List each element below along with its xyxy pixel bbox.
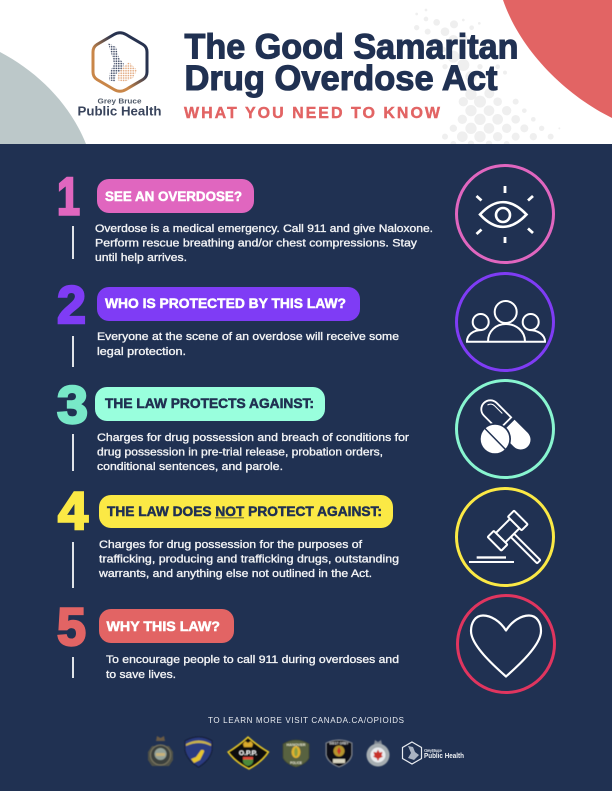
step 4: THE LAW DOES NOT PROTECT AGAINST:	[107, 504, 382, 519]
crest: OPP	[228, 737, 268, 769]
step 1: 1	[57, 168, 80, 226]
step 3: Charges for drug possession and breach of conditions for	[97, 432, 409, 444]
step 2	[57, 276, 399, 367]
step 5: 5	[57, 598, 86, 657]
logo: Grey Bruce Public Health	[78, 33, 162, 118]
crest: West Grey police	[326, 740, 352, 767]
title: Drug Overdose Act	[184, 59, 498, 98]
step 1: Overdose is a medical emergency. Call 911 and give Naloxone.	[95, 223, 433, 235]
crest: Saugeen First Nation police	[185, 737, 212, 767]
step 4: warrants, and anything else not outlined in the Act.	[98, 568, 372, 580]
title: The Good Samaritan	[184, 28, 518, 66]
step 2: WHO IS PROTECTED BY THIS LAW?	[105, 296, 346, 311]
step 1: Perform rescue breathing and/or chest compressions. Stay	[95, 238, 417, 250]
crest: Hanover police	[283, 740, 309, 767]
icon: gavel	[456, 488, 554, 586]
step 3	[57, 376, 409, 473]
step 1	[57, 168, 433, 264]
step 4	[58, 482, 399, 588]
step 5	[57, 598, 399, 681]
step 3: 3	[57, 376, 88, 435]
crest: OPP: O.P.P.	[239, 750, 257, 757]
logo: Grey Bruce Public Health: Grey Bruce	[98, 96, 142, 106]
logo: Grey Bruce Public Health white	[402, 742, 464, 764]
step 4: 4	[58, 482, 89, 541]
icon: heart	[458, 596, 554, 692]
step 3: THE LAW PROTECTS AGAINST:	[105, 396, 314, 411]
step 1: until help arrives.	[95, 252, 187, 264]
step 5: WHY THIS LAW?	[106, 619, 220, 634]
grey corner shape	[0, 52, 86, 144]
footer link text: TO LEARN MORE VISIT CANADA.CA/OPIOIDS	[208, 716, 404, 725]
step 4: trafficking, producing and trafficking drugs, outstanding	[99, 554, 399, 566]
halftone dots	[414, 9, 560, 147]
step 1: SEE AN OVERDOSE?	[105, 189, 242, 204]
coral corner shape	[503, 0, 612, 118]
crest: Ontario police	[366, 740, 390, 766]
title	[184, 28, 518, 98]
logo: Grey Bruce Public Health white: Public Health	[424, 753, 464, 760]
crest: West Grey police: WEST GREY	[329, 742, 349, 746]
icon: eye	[456, 166, 554, 262]
header background	[0, 0, 612, 144]
icon: people	[456, 274, 554, 370]
step 5: to save lives.	[106, 669, 176, 681]
crest: Hanover police: HANOVER	[286, 743, 306, 747]
step 3: drug possession in pre-trial release, probation orders,	[97, 446, 383, 458]
step 2: Everyone at the scene of an overdose will receive some	[97, 331, 399, 343]
crest: Hanover police: POLICE	[290, 761, 302, 765]
icon: pills	[456, 380, 554, 478]
step 4: Charges for drug possession for the purposes of	[99, 539, 363, 551]
step 5: To encourage people to call 911 during overdoses and	[106, 654, 399, 666]
crest: Saugeen Shores police	[148, 736, 173, 766]
logo: Grey Bruce Public Health white: Grey Bruce	[424, 748, 442, 753]
logo: Grey Bruce Public Health: Public Health	[78, 104, 162, 118]
subtitle: WHAT YOU NEED TO KNOW	[184, 105, 441, 122]
step 2: legal protection.	[97, 346, 186, 358]
step 3: conditional sentences, and parole.	[97, 461, 283, 473]
step 2: 2	[57, 276, 86, 335]
